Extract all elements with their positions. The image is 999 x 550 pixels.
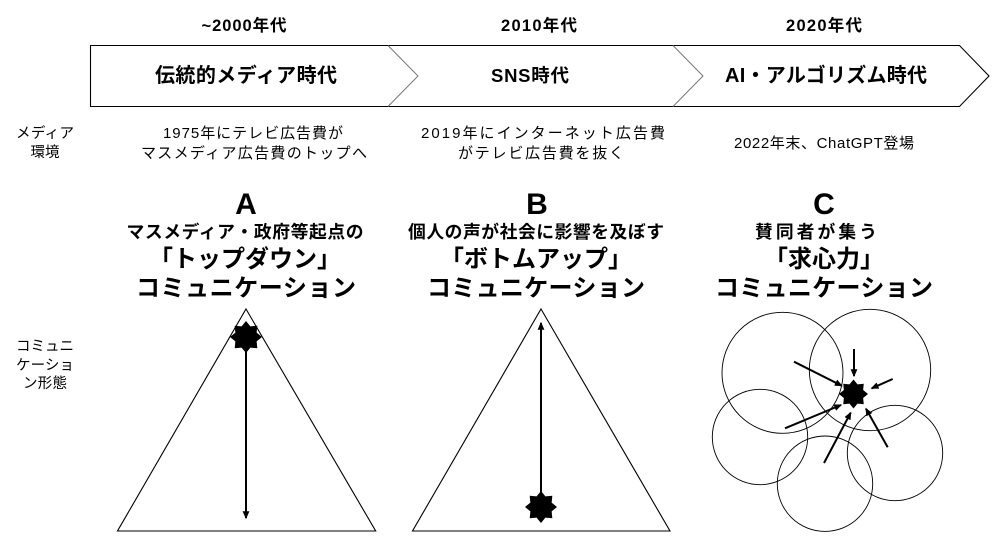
heading C: 賛同者が集う <box>755 221 877 242</box>
heading C <box>715 188 933 302</box>
era label: 2010s: 2010年代 <box>501 15 578 35</box>
row label: communication form: ケーショ <box>16 357 74 374</box>
heading C: コミュニケーション <box>715 275 933 302</box>
heading B <box>408 188 664 302</box>
row label: communication form <box>16 339 74 392</box>
era title: AI and algorithm: AI・アルゴリズム時代 <box>725 63 927 87</box>
media environment text B: 2019年にインターネット広告費 <box>421 125 665 142</box>
era title: traditional media: 伝統的メディア時代 <box>155 63 337 87</box>
heading C: 「求心力」 <box>764 246 884 273</box>
heading A: コミュニケーション <box>136 275 356 302</box>
heading A: 「トップダウン」 <box>149 245 341 273</box>
heading B: B <box>526 188 548 221</box>
timeline arrow band <box>90 46 989 106</box>
heading B: 「ボトムアップ」 <box>440 246 632 273</box>
diagram B: bottom-up triangle <box>412 309 670 531</box>
era label: 2020s: 2020年代 <box>786 15 862 35</box>
media environment text B <box>421 125 665 162</box>
heading A: A <box>235 188 257 221</box>
heading A <box>126 188 364 302</box>
media environment text A: マスメディア広告費のトップへ <box>141 144 367 162</box>
media environment text A: 1975年にテレビ広告費が <box>163 125 343 142</box>
row label: communication form: コミュニ <box>16 339 74 355</box>
heading A: マスメディア・政府等起点の <box>126 221 364 242</box>
diagram C: overlapping circles with centripetal arrows <box>712 309 943 531</box>
row label: media environment <box>16 124 74 161</box>
diagram A: top-down triangle <box>118 309 376 531</box>
media environment text C: 2022年末、ChatGPT登場 <box>734 135 914 152</box>
heading C: C <box>813 188 835 221</box>
media environment text A <box>141 125 367 162</box>
media environment text B: がテレビ広告費を抜く <box>458 145 624 162</box>
row label: communication form: ン形態 <box>23 375 67 392</box>
era label: ~2000s: ~2000年代 <box>202 15 287 35</box>
era title: SNS: SNS時代 <box>491 65 569 86</box>
row label: media environment: メディア <box>16 124 74 142</box>
heading B: 個人の声が社会に影響を及ぼす <box>408 221 664 242</box>
heading B: コミュニケーション <box>427 275 645 302</box>
row label: media environment: 環境 <box>30 144 60 161</box>
